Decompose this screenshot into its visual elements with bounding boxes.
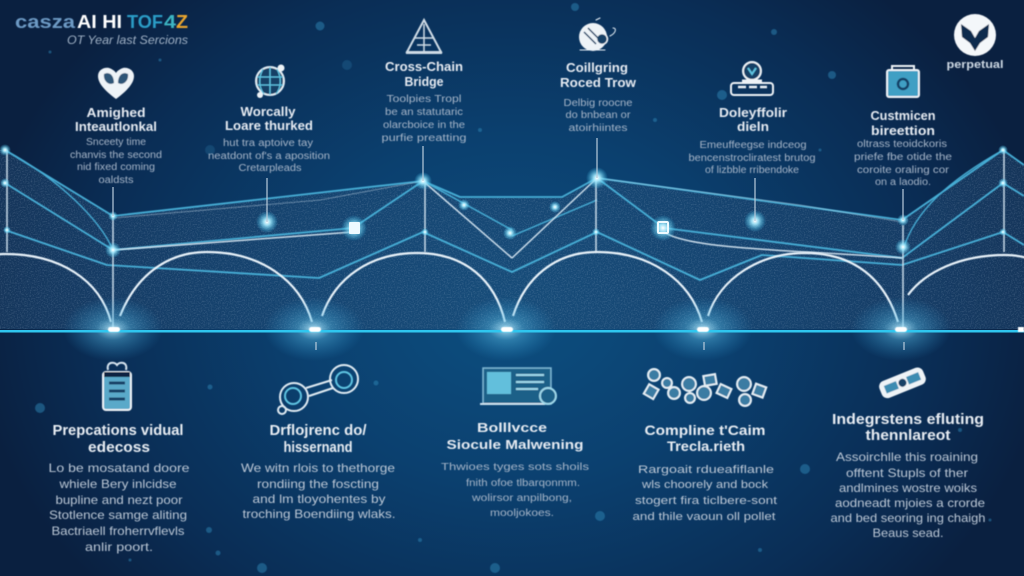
text block: wls choorely and bock bbox=[641, 479, 769, 491]
heading bbox=[870, 108, 936, 138]
text block: purfie preatting bbox=[382, 133, 466, 144]
text block: on a laodio. bbox=[875, 177, 931, 188]
heading: bireettion bbox=[871, 123, 935, 138]
text block bbox=[441, 462, 589, 519]
text block: offtent Stupls of ther bbox=[846, 466, 968, 480]
heading bbox=[385, 59, 463, 89]
panel: top card 5 bbox=[688, 62, 816, 176]
cables bbox=[5, 150, 1024, 280]
panel: bottom card 5 bbox=[830, 366, 986, 540]
text block: and lm tloyohentes by bbox=[252, 492, 386, 506]
icon: conveyor bbox=[731, 62, 773, 95]
heading: Bolllvcce bbox=[477, 420, 547, 435]
text block: stogert fira ticlbere-sont bbox=[635, 495, 777, 507]
heading: dieln bbox=[737, 119, 769, 134]
road line bbox=[0, 330, 1024, 332]
heading: Prepcations vidual bbox=[52, 422, 184, 439]
brand logo top left: AI HI bbox=[77, 12, 122, 32]
heading bbox=[832, 411, 984, 444]
text block: priefe fbe otide the bbox=[854, 152, 953, 163]
text block: aodneadt mjoies a crorde bbox=[835, 496, 985, 510]
text block bbox=[241, 461, 396, 521]
text block: coroite oraling cor bbox=[857, 165, 950, 176]
text block: andlmines wostre woiks bbox=[839, 481, 977, 495]
panel: bottom card 2 bbox=[241, 365, 396, 521]
white hangers and stays bbox=[7, 150, 1004, 330]
text block bbox=[830, 450, 986, 540]
brand logo top left: 4 bbox=[164, 12, 176, 32]
text block: neatdont of's a aposition bbox=[208, 151, 330, 162]
text block bbox=[70, 137, 162, 186]
text block: oltrass teoidckoris bbox=[857, 139, 947, 150]
panel: top card 6 bbox=[854, 66, 953, 188]
text block: mooljokoes. bbox=[490, 508, 554, 519]
icon: swirl bbox=[579, 18, 615, 51]
icon: heart bbox=[98, 68, 134, 99]
heading bbox=[225, 104, 313, 133]
text block: Thwioes tyges sots shoils bbox=[441, 462, 589, 473]
text block: whiele Bery inlcidse bbox=[58, 477, 177, 491]
text block: troching Boendiing wlaks. bbox=[242, 507, 396, 521]
text block: fnith ofoe tlbarqonmm. bbox=[466, 478, 580, 489]
text block: Snceety time bbox=[86, 137, 146, 148]
text block bbox=[382, 94, 466, 144]
icon: token cluster bbox=[644, 369, 766, 406]
text block: Assoirchlle this roaining bbox=[836, 450, 978, 464]
heading: Loare thurked bbox=[225, 118, 313, 133]
text block: hut tra aptoive tay bbox=[223, 138, 313, 149]
text block bbox=[854, 139, 953, 188]
road glow bbox=[63, 297, 951, 361]
text block: Stotlence samge aliting bbox=[49, 508, 187, 522]
text block: and bed seoring ing chaigh bbox=[830, 511, 986, 525]
heading: thennlareot bbox=[866, 427, 950, 444]
icon: link chip bbox=[877, 366, 928, 400]
brand logo top left: Z bbox=[176, 12, 188, 32]
heading bbox=[270, 422, 367, 456]
brand logo top left: TOF bbox=[127, 12, 163, 32]
text block: Cretarpleads bbox=[238, 163, 302, 174]
bridge glowing nodes bbox=[0, 144, 1008, 258]
heading: Indegrstens efluting bbox=[832, 411, 984, 428]
heading bbox=[75, 105, 157, 134]
text block bbox=[208, 138, 330, 174]
heading: Siocule Malwening bbox=[446, 437, 584, 452]
heading: Doleyffolir bbox=[719, 105, 787, 120]
brand logo top right bbox=[946, 14, 1004, 71]
text block: be an statutaric bbox=[385, 107, 463, 118]
heading bbox=[644, 422, 766, 454]
heading: edecoss bbox=[88, 439, 150, 456]
icon: laptop and coin bbox=[480, 368, 556, 404]
brand logo top left: casza bbox=[15, 12, 76, 32]
bridge arches bbox=[0, 252, 1024, 329]
text block: chanvis the second bbox=[70, 150, 162, 161]
icon: globe bbox=[256, 64, 284, 98]
brand logo top left bbox=[15, 12, 188, 47]
icon: case bbox=[887, 66, 919, 97]
heading: Amighed bbox=[86, 105, 146, 120]
heading: Worcally bbox=[240, 104, 296, 119]
text block: wolirsor anpilbong, bbox=[471, 493, 572, 504]
text block: olarcboice in the bbox=[383, 120, 465, 131]
heading: Inteautlonkal bbox=[75, 119, 157, 134]
brand logo top left: OT Year last Sercions bbox=[67, 33, 188, 47]
text block: do bnbean or bbox=[566, 110, 631, 121]
heading: Compline t'Caim bbox=[644, 422, 766, 438]
text block: Beaus sead. bbox=[872, 526, 944, 540]
heading: Drflojrenc do/ bbox=[270, 422, 367, 439]
heading: Custmicen bbox=[870, 108, 936, 123]
bridge illustration bbox=[0, 138, 1024, 361]
heading bbox=[719, 105, 787, 134]
panel: top card 4 bbox=[560, 18, 637, 134]
heading: hissernand bbox=[284, 439, 352, 456]
text block: rondiing the foscting bbox=[257, 477, 379, 491]
panel: top card 3 bbox=[382, 20, 466, 144]
heading: Coillgring bbox=[566, 60, 628, 75]
text block: and thile vaoun oll pollet bbox=[632, 511, 776, 523]
text block: Bactriaell froherrvflevls bbox=[52, 524, 184, 538]
text block: Delbig roocne bbox=[564, 98, 633, 109]
text block: atoirhiintes bbox=[568, 123, 628, 134]
brand logo top right: perpetual bbox=[946, 59, 1004, 71]
icon: bridge pylon bbox=[406, 20, 442, 54]
panel: bottom card 4 bbox=[632, 369, 777, 523]
text block: Lo be mosatand doore bbox=[48, 461, 190, 475]
text block: Emeuffeegse indceog bbox=[700, 140, 806, 151]
text block: bencenstrocliratest brutog bbox=[688, 153, 816, 164]
heading: Bridge bbox=[404, 74, 444, 89]
road nodes bbox=[108, 327, 1024, 332]
text block: oaldsts bbox=[98, 175, 134, 186]
text block: We witn rlois to thethorge bbox=[241, 461, 395, 475]
heading bbox=[560, 60, 637, 90]
panel: top card 2 bbox=[208, 64, 330, 174]
icon: linked chain bbox=[278, 365, 358, 414]
text block bbox=[564, 98, 633, 134]
text block: Rargoait rdueafiflanle bbox=[638, 464, 774, 476]
text block bbox=[688, 140, 816, 176]
text block bbox=[48, 461, 190, 554]
heading: Trecla.rieth bbox=[667, 438, 745, 454]
text block bbox=[632, 464, 777, 523]
leader lines bbox=[113, 138, 904, 350]
deck texture bbox=[0, 140, 1024, 330]
text block: nid fixed coming bbox=[77, 162, 155, 173]
text block: bupline and nezt poor bbox=[56, 493, 182, 507]
text block: Toolpies Tropl bbox=[386, 94, 462, 105]
panel: top card 1 bbox=[70, 68, 162, 186]
heading bbox=[446, 420, 584, 452]
text block: anlir poort. bbox=[85, 540, 153, 554]
heading: Cross-Chain bbox=[385, 59, 463, 74]
panel: bottom card 1 bbox=[48, 363, 190, 554]
text block: of lizbble rribendoke bbox=[705, 165, 799, 176]
icon: phone bbox=[103, 363, 131, 410]
heading: Roced Trow bbox=[560, 75, 637, 90]
heading bbox=[52, 422, 184, 456]
panel: bottom card 3 bbox=[441, 368, 589, 519]
